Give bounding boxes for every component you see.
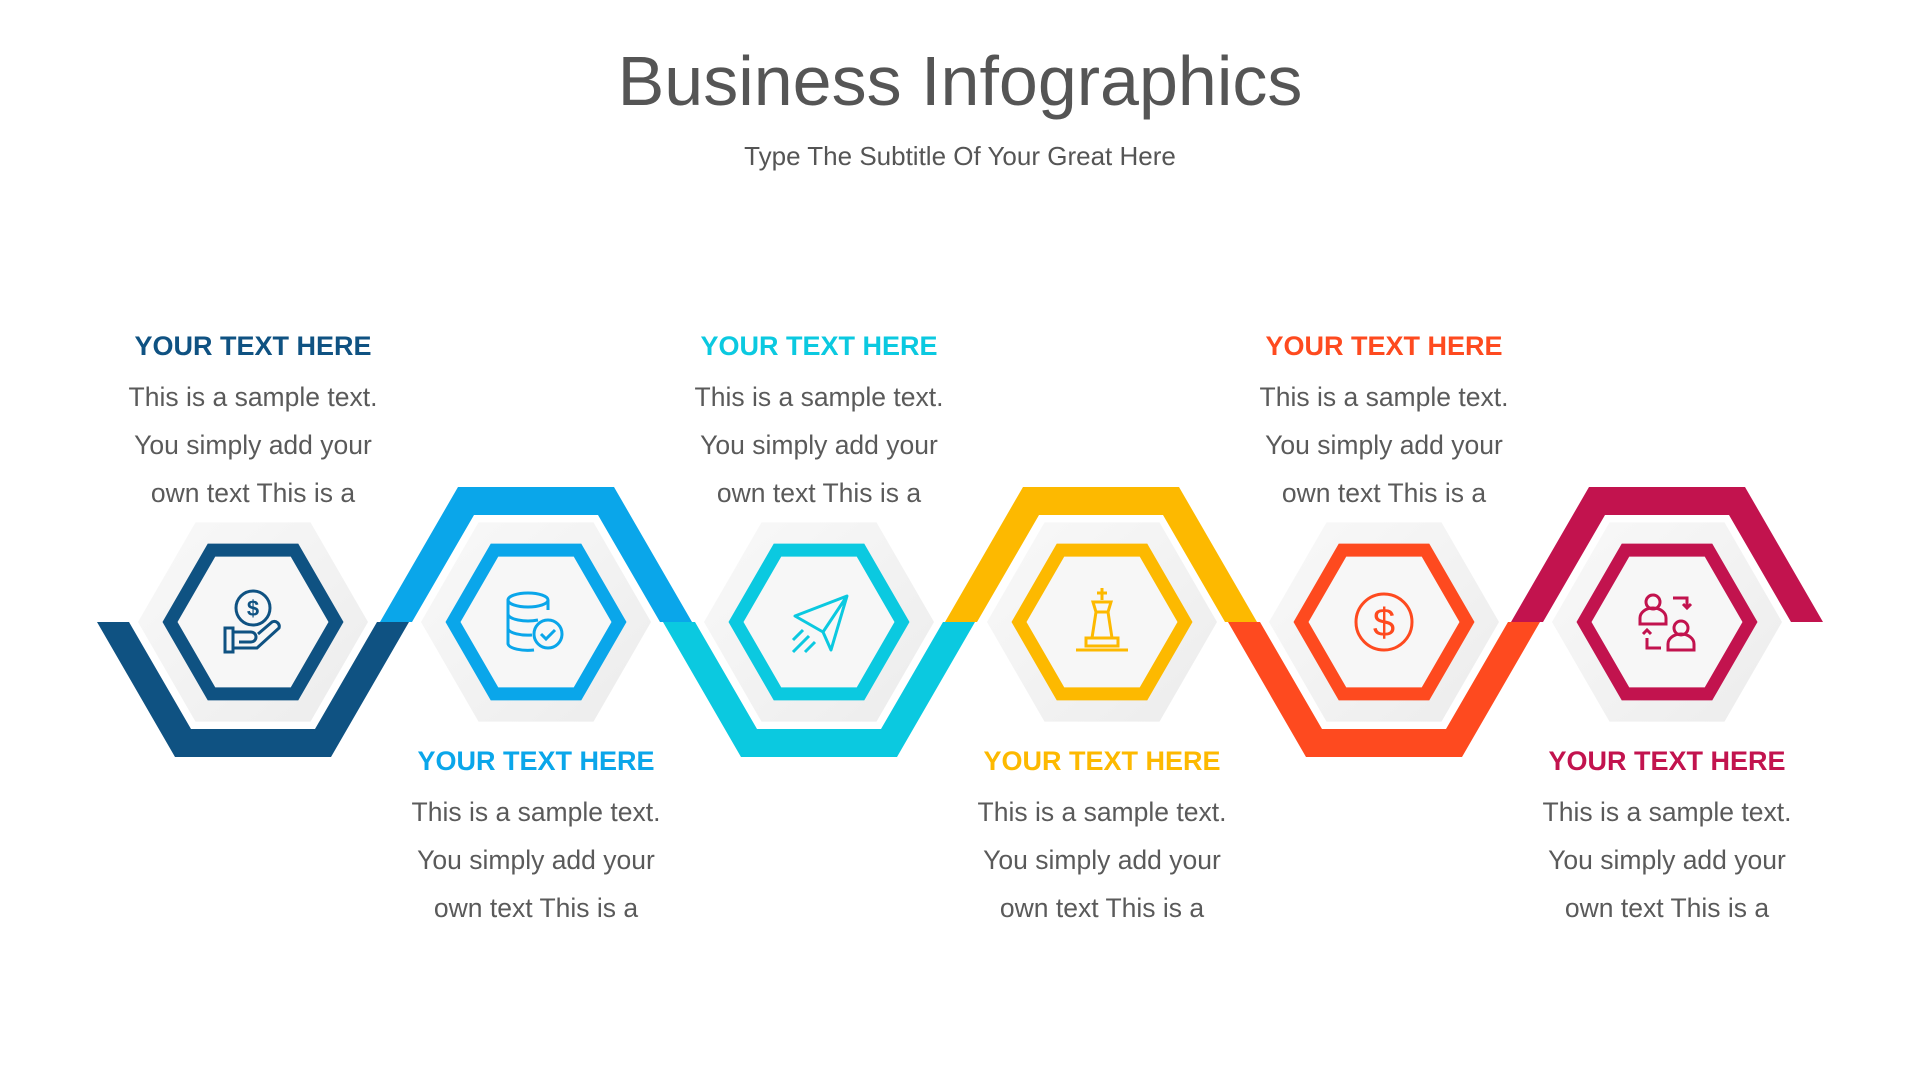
icon: paper plane — [793, 596, 847, 652]
text block 4: This is a sample text. — [978, 797, 1226, 827]
text block 1: own text This is a — [151, 478, 355, 508]
text block 2: This is a sample text. — [412, 797, 660, 827]
text block 4: You simply add your — [983, 845, 1221, 875]
text block 5: You simply add your — [1265, 430, 1503, 460]
text block 4: own text This is a — [1000, 893, 1204, 923]
text block 4: YOUR TEXT HERE — [983, 746, 1221, 776]
band 3 — [663, 622, 975, 757]
text block 6: own text This is a — [1565, 893, 1769, 923]
icon: dollar coin — [1356, 594, 1412, 650]
icon: hand with coin — [225, 591, 279, 652]
text block 5: own text This is a — [1282, 478, 1486, 508]
text block 1: You simply add your — [134, 430, 372, 460]
band 4 — [945, 487, 1257, 622]
text block 1: This is a sample text. — [129, 382, 377, 412]
text block 3: You simply add your — [700, 430, 938, 460]
hex 4 — [987, 522, 1217, 722]
hex 2 — [421, 522, 651, 722]
hex 6 — [1552, 522, 1782, 722]
title: Business Infographics — [618, 42, 1302, 120]
text block 3: This is a sample text. — [695, 382, 943, 412]
hex 3 — [704, 522, 934, 722]
text block 1 — [129, 331, 377, 508]
band 6 — [1511, 487, 1823, 622]
band 1 — [97, 622, 409, 757]
text block 5 — [1260, 331, 1508, 508]
icon: chess king — [1076, 588, 1128, 650]
text block 3: YOUR TEXT HERE — [700, 331, 938, 361]
icon: hand with coin: $ — [247, 596, 259, 621]
icon: database check — [508, 593, 562, 650]
text block 5: YOUR TEXT HERE — [1265, 331, 1503, 361]
text block 4 — [978, 746, 1226, 923]
icon: people exchange — [1640, 595, 1694, 650]
text block 6: YOUR TEXT HERE — [1548, 746, 1786, 776]
text block 6: This is a sample text. — [1543, 797, 1791, 827]
band 5 — [1228, 622, 1540, 757]
subtitle: Type The Subtitle Of Your Great Here — [744, 141, 1176, 171]
text block 6 — [1543, 746, 1791, 923]
band 2 — [380, 487, 692, 622]
text block 5: This is a sample text. — [1260, 382, 1508, 412]
text block 6: You simply add your — [1548, 845, 1786, 875]
hex 5 — [1269, 522, 1499, 722]
text block 2: own text This is a — [434, 893, 638, 923]
text block 1: YOUR TEXT HERE — [134, 331, 372, 361]
text block 3 — [695, 331, 943, 508]
hex 1 — [138, 522, 368, 722]
text block 2: YOUR TEXT HERE — [417, 746, 655, 776]
text block 2: You simply add your — [417, 845, 655, 875]
icon: dollar coin: $ — [1373, 601, 1395, 645]
text block 2 — [412, 746, 660, 923]
text block 3: own text This is a — [717, 478, 921, 508]
